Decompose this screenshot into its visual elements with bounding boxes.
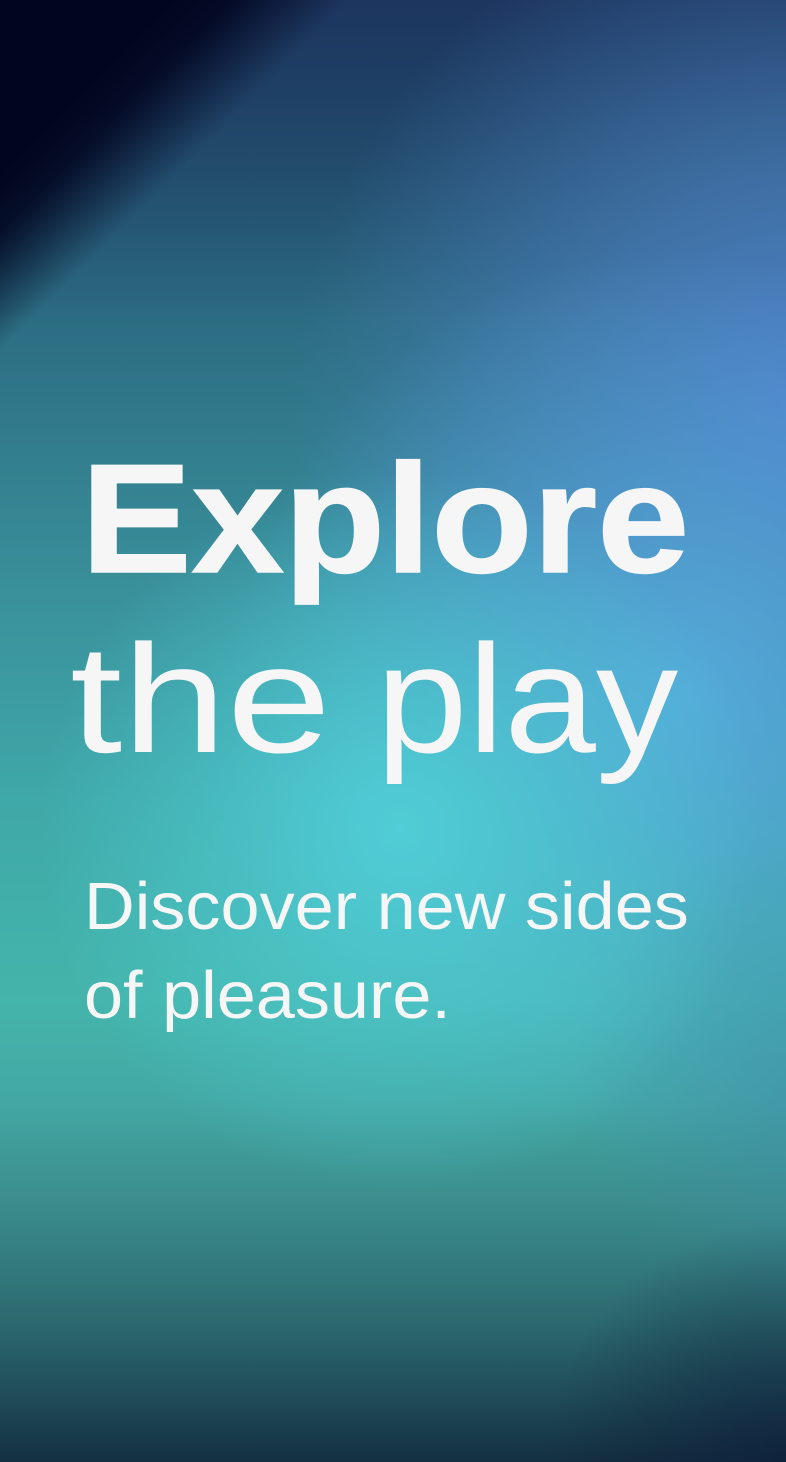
tagline: of pleasure. xyxy=(84,958,451,1033)
word: play: play xyxy=(376,613,678,785)
heading: the play xyxy=(70,613,678,785)
tagline xyxy=(84,869,689,1033)
heading: Explore: Explore xyxy=(81,432,689,605)
tagline: Discover new sides xyxy=(84,869,689,944)
word: the: the xyxy=(70,613,331,785)
